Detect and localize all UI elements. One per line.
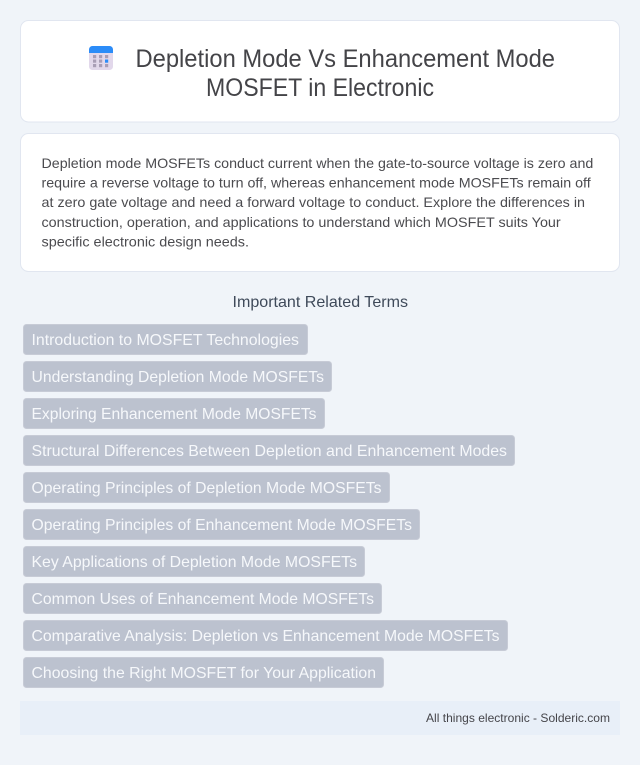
heading: important related terms: Important Related Terms — [232, 294, 408, 311]
list: related terms — [24, 324, 514, 688]
text block: description: require a reverse voltage to turn off, whereas enhancement mode MOSFETs remain off — [42, 175, 591, 191]
text block: description: construction, operation, and applications to understand which MOSFET suits Your — [42, 214, 561, 230]
footer — [20, 701, 620, 735]
term 10 — [24, 658, 384, 688]
term 1 — [24, 324, 308, 354]
term 3 — [24, 398, 324, 428]
term 6: Operating Principles of Enhancement Mode MOSFETs — [32, 517, 412, 534]
term 8: Common Uses of Enhancement Mode MOSFETs — [32, 591, 374, 608]
term 2: Understanding Depletion Mode MOSFETs — [32, 369, 324, 386]
title: MOSFET in Electronic — [206, 74, 434, 102]
term 7: Key Applications of Depletion Mode MOSFETs — [32, 554, 357, 571]
text block: description: Depletion mode MOSFETs conduct current when the gate-to-source voltage is zero and — [42, 155, 593, 171]
term 3: Exploring Enhancement Mode MOSFETs — [32, 406, 316, 423]
footer: All things electronic - Solderic.com — [426, 711, 610, 725]
term 5 — [24, 472, 390, 502]
term 9: Comparative Analysis: Depletion vs Enhancement Mode MOSFETs — [32, 628, 500, 645]
term 4: Structural Differences Between Depletion and Enhancement Modes — [32, 443, 507, 460]
icon: calendar — [89, 46, 113, 70]
term 10: Choosing the Right MOSFET for Your Application — [32, 665, 376, 682]
term 2 — [24, 362, 332, 392]
term 1: Introduction to MOSFET Technologies — [32, 332, 299, 349]
term 7 — [24, 546, 364, 576]
term 9 — [24, 620, 508, 650]
term 6 — [24, 510, 420, 540]
text block: description: specific electronic design needs. — [42, 233, 249, 249]
title: Depletion Mode Vs Enhancement Mode — [136, 45, 555, 73]
text block: description: at zero gate voltage and need a forward voltage to conduct. Explore the differences in — [42, 194, 585, 210]
panel: title header — [20, 20, 620, 122]
term 5: Operating Principles of Depletion Mode MOSFETs — [32, 480, 382, 497]
text block: description — [42, 155, 593, 249]
panel: description — [20, 134, 620, 272]
term 4 — [24, 436, 514, 466]
term 8 — [24, 584, 382, 614]
title — [136, 45, 555, 102]
